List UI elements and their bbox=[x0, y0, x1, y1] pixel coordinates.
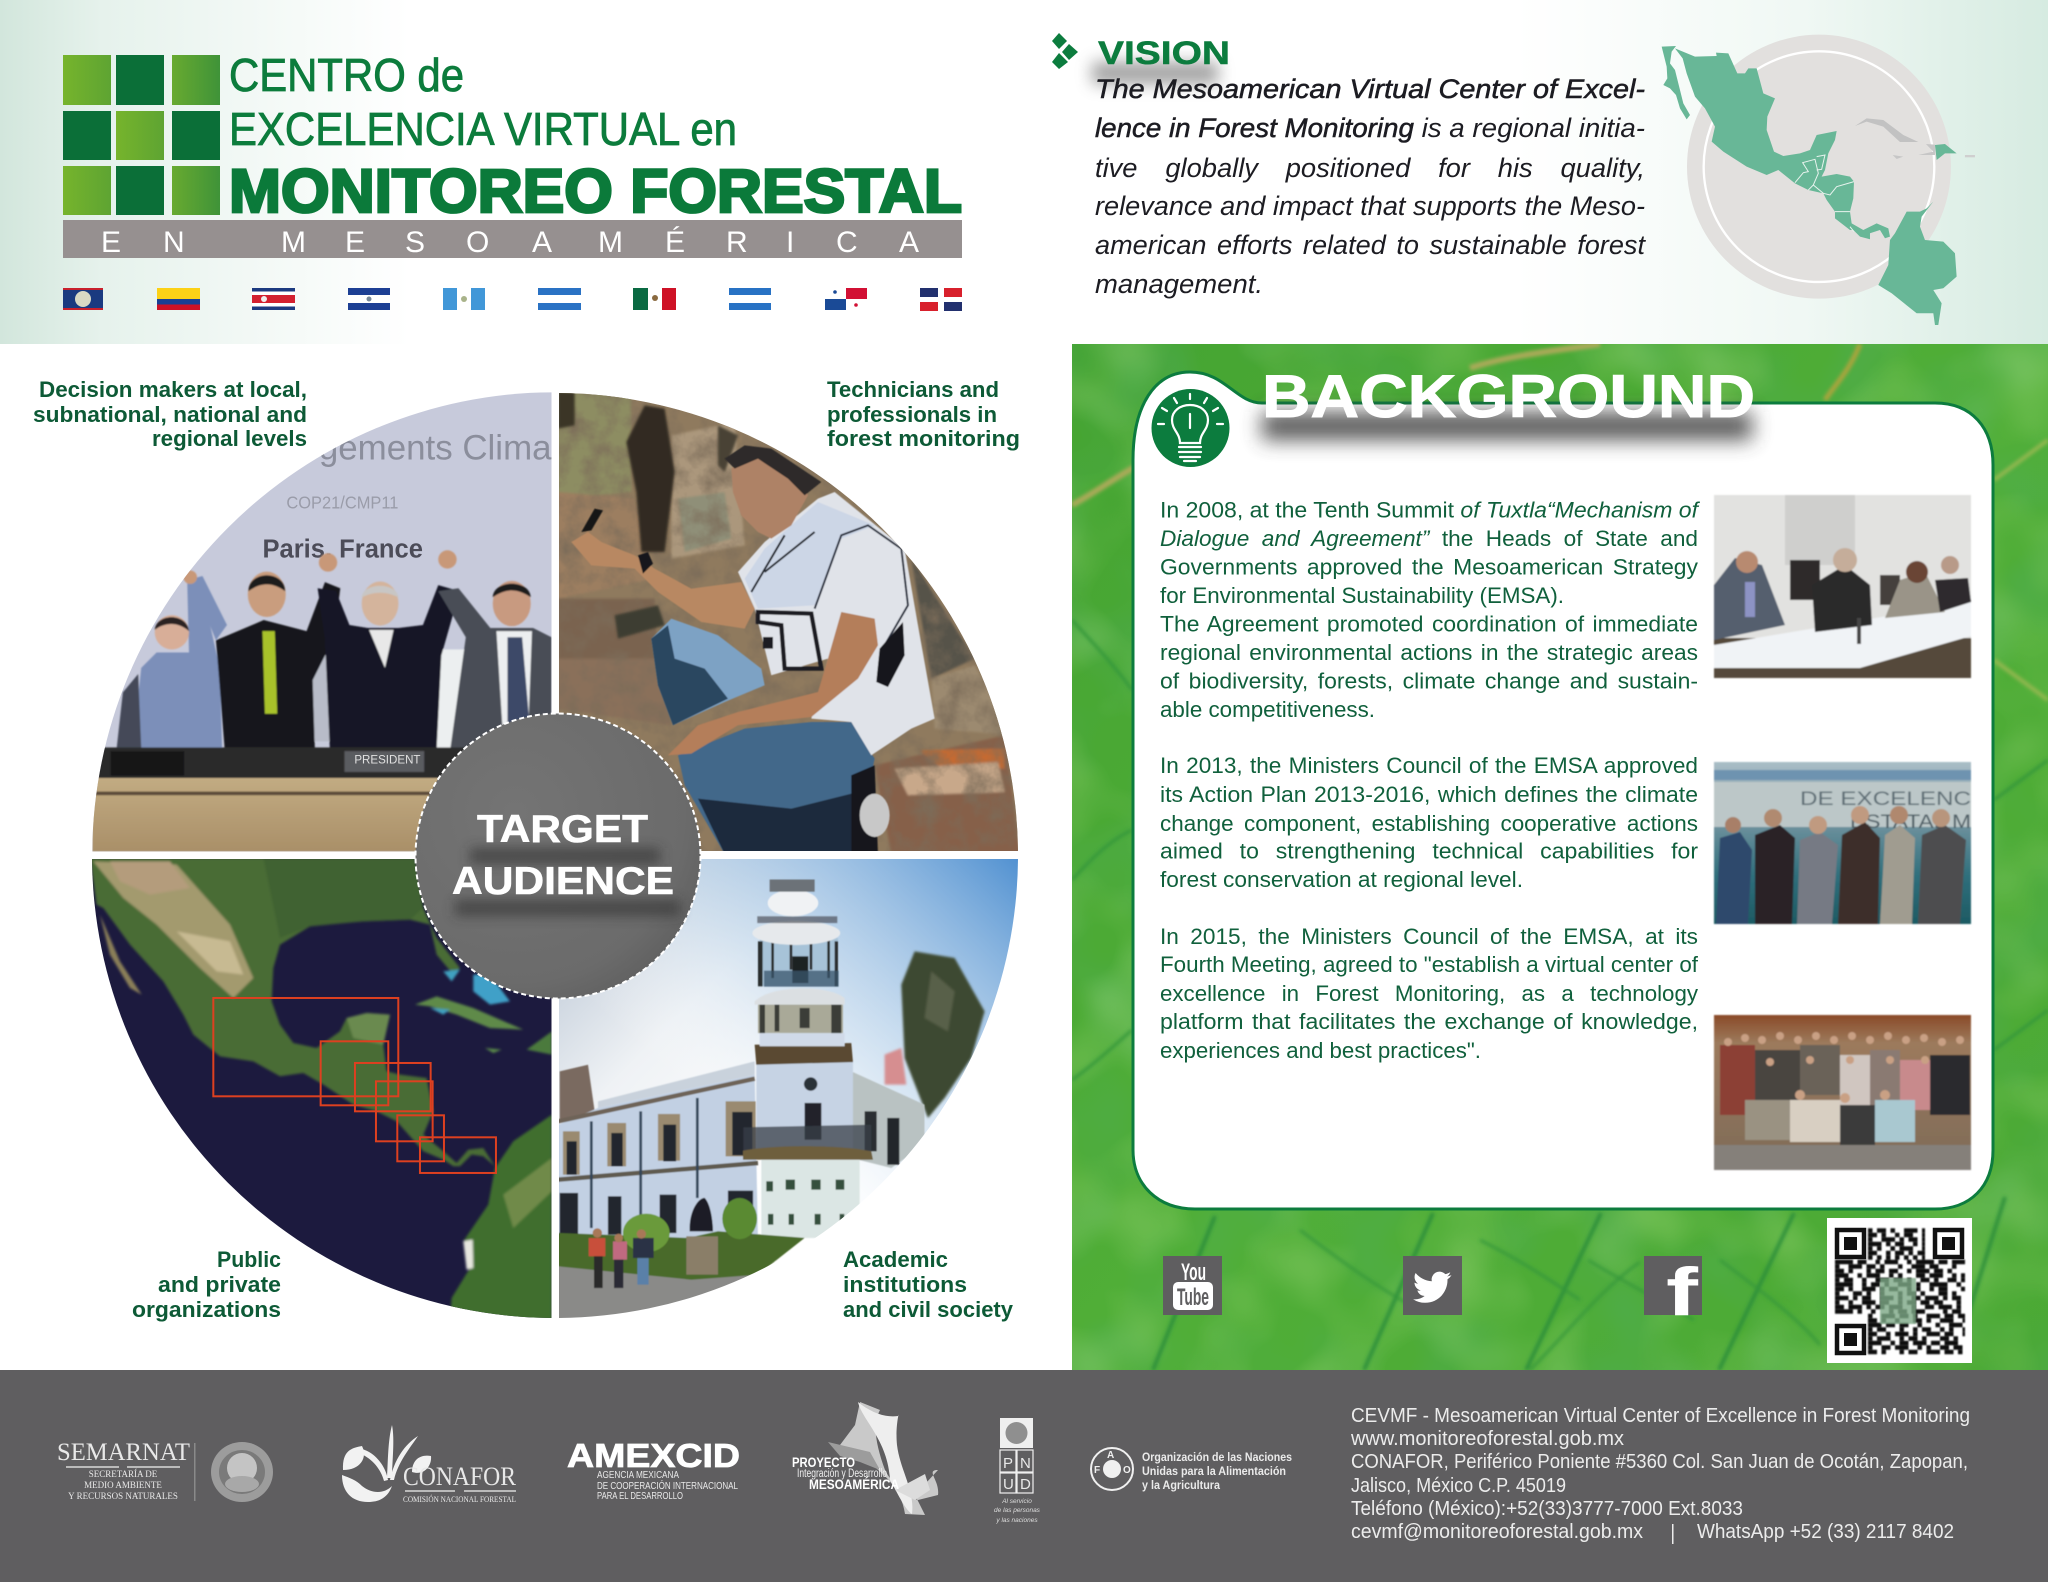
logo: FAO: Unidas para la Alimentación bbox=[1142, 1464, 1286, 1478]
label: technicians: professionals in bbox=[827, 402, 997, 427]
social media icons bbox=[1163, 1218, 1972, 1363]
icon: YouTube: You bbox=[1181, 1259, 1206, 1286]
logo: UNDP: D bbox=[1020, 1476, 1031, 1493]
background text: paragraph 3: experiences and best practices". bbox=[1160, 1038, 1481, 1063]
flag: Colombia bbox=[157, 288, 200, 310]
header background band bbox=[0, 0, 2048, 344]
title line 3: MONITOREO FORESTAL bbox=[229, 157, 962, 225]
label: academic bbox=[843, 1247, 1014, 1322]
icon: light bulb bbox=[1152, 389, 1230, 467]
contact information: Teléfono (México):+52(33)3777-7000 Ext.8033 bbox=[1351, 1498, 1743, 1520]
logo: SEMARNAT: Y RECURSOS NATURALES bbox=[68, 1491, 178, 1501]
background text: paragraph 1: Governments approved the Mesoamerican Strategy bbox=[1160, 554, 1698, 580]
center circle: target audience: AUDIENCE bbox=[452, 860, 674, 903]
contact information: CONAFOR, Periférico Poniente #5360 Col. San Juan de Ocotán, Zapopan, bbox=[1351, 1451, 1968, 1473]
background text: paragraph 2: aimed to strengthening technical capabilities for bbox=[1160, 838, 1698, 864]
logo: FAO: A bbox=[1107, 1450, 1114, 1461]
logo: UNDP: de las personas bbox=[994, 1507, 1041, 1514]
background text: paragraph 1: for Environmental Sustainability (EMSA). bbox=[1160, 583, 1564, 608]
vision heading: VISION bbox=[1098, 35, 1230, 71]
white rounded card with tab bbox=[1133, 372, 1993, 1209]
label: decision makers: Decision makers at local, bbox=[39, 377, 307, 402]
contact information: Jalisco, México C.P. 45019 bbox=[1351, 1475, 1566, 1497]
photo: Paris climate summit leaders bbox=[80, 380, 552, 852]
subtitle bar: EN MESOAMÉRICA bbox=[101, 226, 919, 259]
logo: AMEXCID bbox=[567, 1437, 740, 1502]
photo: group standing bbox=[1714, 762, 1971, 924]
logo: SEMARNAT: SEMARNAT bbox=[57, 1439, 190, 1466]
flag: Honduras bbox=[538, 288, 581, 310]
vision paragraph: The Mesoamerican Virtual Center of Excel- bbox=[1095, 74, 1645, 104]
logo: UNDP: N bbox=[1020, 1455, 1031, 1472]
background text: paragraph 1: In 2008, at the Tenth Summit of Tuxtla“Mechanism of bbox=[1160, 498, 1701, 522]
label: technicians bbox=[827, 377, 1020, 451]
background text: paragraph 2: its Action Plan 2013-2016, which defines the climate bbox=[1160, 782, 1698, 807]
vision paragraph bbox=[1095, 74, 1646, 299]
background text: paragraph 1: of biodiversity, forests, climate change and sustain- bbox=[1160, 669, 1698, 694]
background text: paragraph 1: able competitiveness. bbox=[1160, 697, 1375, 722]
panel: background bbox=[1133, 363, 1993, 1209]
logo: FAO: Organización de las Naciones bbox=[1142, 1450, 1292, 1464]
logo: Proyecto Mesoamérica: Integración y Desarrollo bbox=[797, 1468, 887, 1480]
label: organizations bbox=[132, 1247, 281, 1322]
photo: group standing: ESTATAL M bbox=[1850, 812, 1971, 833]
vision section bbox=[1052, 33, 1975, 325]
logo: CONAFOR: COMISIÓN NACIONAL FORESTAL bbox=[403, 1494, 516, 1504]
vision heading shadow bbox=[1092, 62, 1218, 84]
logo: UNDP: U bbox=[1003, 1476, 1014, 1493]
label: organizations: and private bbox=[158, 1272, 281, 1297]
logo: UNDP bbox=[994, 1418, 1041, 1524]
vision paragraph: lence in Forest Monitoring is a regional initia- bbox=[1095, 113, 1645, 143]
label: decision makers: subnational, national and bbox=[33, 402, 307, 427]
logo: FAO: O bbox=[1123, 1465, 1131, 1476]
label: organizations: organizations bbox=[132, 1297, 281, 1322]
photo: signing ceremony bbox=[1714, 495, 1971, 678]
contact information: www.monitoreoforestal.gob.mx bbox=[1350, 1428, 1624, 1450]
background text: paragraph 3: platform that facilitates the exchange of knowledge, bbox=[1160, 1009, 1698, 1034]
title line 2: EXCELENCIA VIRTUAL en bbox=[229, 103, 737, 155]
background text: paragraph 2 bbox=[1160, 753, 1698, 892]
logo: UNDP: Al servicio bbox=[1001, 1498, 1032, 1505]
logo: Proyecto Mesoamérica: MESOAMÉRICA bbox=[809, 1477, 899, 1492]
background text: paragraph 1 bbox=[1160, 498, 1701, 722]
photo: technician in forest bbox=[558, 392, 1025, 859]
logo: UNDP: P bbox=[1003, 1455, 1013, 1472]
vision paragraph: relevance and impact that supports the Meso- bbox=[1095, 191, 1645, 221]
title line 1: CENTRO de bbox=[229, 49, 464, 101]
flags row bbox=[63, 288, 962, 311]
logo: SEMARNAT bbox=[57, 1439, 273, 1502]
icon: diamonds bbox=[1052, 33, 1078, 69]
label: technicians: forest monitoring bbox=[827, 426, 1020, 451]
icon: green square grid bbox=[63, 55, 220, 215]
contact information: cevmf@monitoreoforestal.gob.mx bbox=[1351, 1521, 1643, 1543]
icon: YouTube: Tube bbox=[1177, 1284, 1209, 1311]
background heading shadow bbox=[1262, 412, 1752, 440]
flag: Belize bbox=[63, 288, 103, 310]
map of Mesoamerica bbox=[1662, 35, 1975, 325]
center circle: target audience bbox=[416, 714, 700, 998]
logo: FAO bbox=[1091, 1448, 1292, 1492]
contact information: WhatsApp +52 (33) 2117 8402 bbox=[1697, 1521, 1954, 1543]
flag: Nicaragua bbox=[729, 288, 771, 310]
flag: El Salvador bbox=[348, 288, 390, 310]
logo: CONAFOR bbox=[342, 1425, 517, 1504]
QR code bbox=[1827, 1218, 1972, 1363]
contact information: CEVMF - Mesoamerican Virtual Center of Excellence in Forest Monitoring bbox=[1351, 1405, 1970, 1427]
icon: YouTube bbox=[1163, 1256, 1222, 1315]
label: academic: Academic bbox=[843, 1247, 948, 1272]
logo: AMEXCID: AGENCIA MEXICANA bbox=[597, 1470, 679, 1481]
background text: paragraph 3: Fourth Meeting, agreed to "establish a virtual center of bbox=[1160, 952, 1699, 977]
vision paragraph: american efforts related to sustainable forest bbox=[1095, 230, 1646, 260]
background text: paragraph 3 bbox=[1160, 924, 1699, 1063]
logo: SEMARNAT: SECRETARÍA DE bbox=[89, 1469, 158, 1479]
vision paragraph: tive globally positioned for his quality, bbox=[1095, 153, 1645, 183]
logo: Centro de Excelencia Virtual en Monitoreo Forestal bbox=[63, 49, 962, 259]
logo: AMEXCID: AMEXCID bbox=[567, 1437, 740, 1474]
icon: Twitter bbox=[1403, 1256, 1462, 1315]
background text: paragraph 2: forest conservation at regional level. bbox=[1160, 867, 1523, 892]
photo: large group seated bbox=[1714, 1015, 1971, 1170]
vision paragraph: management. bbox=[1095, 269, 1263, 299]
logo: UNDP: y las naciones bbox=[995, 1517, 1038, 1524]
flag: Mexico bbox=[633, 288, 676, 310]
label: academic: and civil society bbox=[843, 1297, 1014, 1322]
contact information bbox=[1350, 1405, 1970, 1544]
flag: Dominican Republic bbox=[920, 288, 962, 311]
footer band bbox=[0, 1370, 2048, 1582]
footer logos bbox=[57, 1402, 1292, 1524]
background text: paragraph 2: change component, establishing cooperative actions bbox=[1160, 811, 1698, 836]
label: academic: institutions bbox=[843, 1272, 967, 1297]
photo: satellite map with red boxes bbox=[90, 858, 557, 1325]
photo: Paris climate summit leaders: PRESIDENT bbox=[354, 753, 420, 766]
photo: Paris climate summit leaders: COP21/CMP11 bbox=[286, 493, 398, 513]
background text: paragraph 1: regional environmental actions in the strategic areas bbox=[1160, 640, 1698, 665]
logo: CONAFOR: CONAFOR bbox=[403, 1462, 517, 1491]
logo: AMEXCID: DE COOPERACIÓN INTERNACIONAL bbox=[597, 1479, 738, 1492]
panel: leaf background bbox=[1072, 344, 2048, 1370]
logo: Proyecto Mesoamérica bbox=[792, 1402, 938, 1515]
flag: Costa Rica bbox=[252, 288, 295, 310]
photo: group standing: DE EXCELENC bbox=[1800, 789, 1971, 810]
target audience photo circle bbox=[80, 380, 1025, 1325]
flag: Panama bbox=[825, 288, 867, 310]
label: decision makers: regional levels bbox=[152, 426, 307, 451]
background text: paragraph 2: In 2013, the Ministers Council of the EMSA approved bbox=[1160, 753, 1698, 778]
icon: Facebook: f bbox=[1666, 1254, 1698, 1330]
label: technicians: Technicians and bbox=[827, 377, 999, 402]
background text: paragraph 1: The Agreement promoted coordination of immediate bbox=[1160, 612, 1698, 637]
logo: FAO: y la Agricultura bbox=[1142, 1478, 1220, 1492]
background text: paragraph 3: In 2015, the Ministers Council of the EMSA, at its bbox=[1160, 924, 1698, 949]
logo: Proyecto Mesoamérica: PROYECTO bbox=[792, 1455, 855, 1470]
icon: Facebook bbox=[1644, 1254, 1702, 1330]
label: organizations: Public bbox=[217, 1247, 281, 1272]
logo: AMEXCID: PARA EL DESARROLLO bbox=[597, 1491, 683, 1502]
background text: paragraph 3: excellence in Forest Monitoring, as a technology bbox=[1160, 981, 1698, 1006]
flag: Guatemala bbox=[443, 288, 485, 310]
background text: paragraph 1: Dialogue and Agreement” the Heads of State and bbox=[1160, 526, 1698, 551]
logo: FAO: F bbox=[1094, 1465, 1100, 1476]
photo: Paris climate summit leaders: gements Clima bbox=[319, 428, 552, 468]
center circle: target audience: TARGET bbox=[477, 808, 648, 851]
label: decision makers bbox=[33, 377, 307, 451]
photo: academic building bbox=[558, 858, 1025, 1325]
logo: SEMARNAT: MEDIO AMBIENTE bbox=[84, 1480, 162, 1490]
background heading: BACKGROUND bbox=[1262, 363, 1755, 430]
photo: Paris climate summit leaders: Paris, France bbox=[262, 536, 423, 564]
